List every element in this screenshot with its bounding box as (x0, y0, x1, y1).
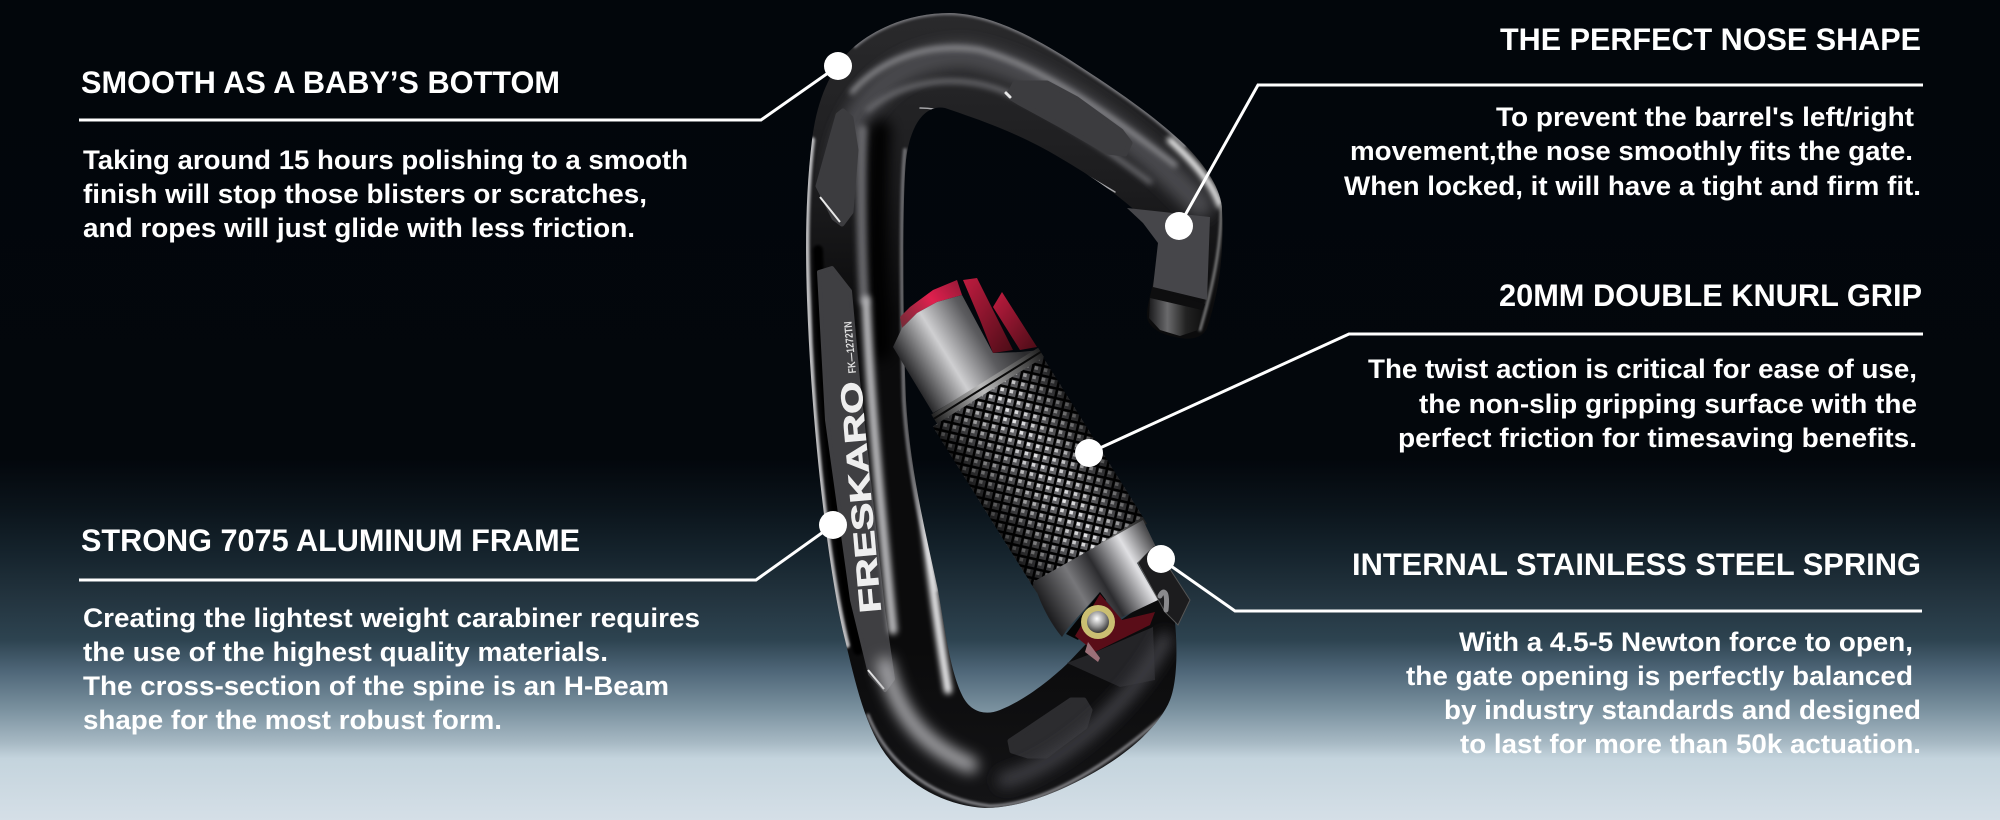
description: by industry standards and designed (1444, 695, 1921, 725)
marker dot (1147, 545, 1175, 573)
description (83, 145, 688, 243)
brand text on spine: FK—1272TN (842, 321, 859, 374)
brand text on spine (835, 321, 888, 614)
description: The cross-section of the spine is an H-Beam (83, 671, 669, 701)
leader line (1161, 559, 1922, 611)
description: With a 4.5-5 Newton force to open, (1459, 627, 1913, 657)
top collar (893, 295, 1040, 413)
description: To prevent the barrel's left/right (1496, 102, 1914, 132)
screw gate barrel (893, 278, 1190, 662)
carabiner illustration (806, 13, 1222, 808)
description: to last for more than 50k actuation. (1460, 729, 1921, 759)
description (1368, 354, 1917, 453)
leader line (79, 525, 833, 580)
description: When locked, it will have a tight and firm fit. (1344, 171, 1921, 201)
description: and ropes will just glide with less friction. (83, 213, 635, 243)
red inner blades (963, 278, 1037, 353)
marker dot (1075, 439, 1103, 467)
heading: STRONG 7075 ALUMINUM FRAME (81, 522, 580, 558)
locking pin (1081, 605, 1115, 639)
callout: smooth finish (79, 52, 852, 243)
heading: THE PERFECT NOSE SHAPE (1500, 21, 1921, 57)
description (1406, 627, 1921, 759)
heading: INTERNAL STAINLESS STEEL SPRING (1352, 546, 1921, 582)
heading: SMOOTH AS A BABY’S BOTTOM (81, 64, 560, 100)
spine highlights (866, 300, 1165, 806)
knurled grip (927, 348, 1148, 593)
bottom collar (1033, 520, 1190, 662)
marker dot (824, 52, 852, 80)
description: shape for the most robust form. (83, 705, 502, 735)
leader line (1089, 334, 1923, 453)
red rim (900, 280, 962, 328)
description: Taking around 15 hours polishing to a smooth (83, 145, 688, 175)
marker dot (1165, 212, 1193, 240)
recessed panels (818, 83, 1210, 756)
description: Creating the lightest weight carabiner requires (83, 603, 700, 633)
description: the use of the highest quality materials. (83, 637, 608, 667)
callout: aluminum frame (79, 511, 847, 735)
callout: steel spring (1147, 545, 1922, 759)
leader line (79, 66, 838, 120)
description (1344, 102, 1921, 201)
lower nose tip (1160, 592, 1167, 610)
description: the gate opening is perfectly balanced (1406, 661, 1913, 691)
description (83, 603, 700, 735)
description: perfect friction for timesaving benefits. (1398, 423, 1917, 453)
carabiner body (806, 13, 1222, 808)
callout: knurl grip (1075, 277, 1923, 467)
marker dot (819, 511, 847, 539)
callout: nose shape (1165, 21, 1923, 240)
heading: 20MM DOUBLE KNURL GRIP (1499, 277, 1922, 313)
description: the non-slip gripping surface with the (1419, 389, 1917, 419)
description: finish will stop those blisters or scratches, (83, 179, 647, 209)
leader line (1179, 85, 1923, 226)
description: The twist action is critical for ease of use, (1368, 354, 1917, 384)
brand text on spine: FRESKARO (835, 380, 888, 614)
description: movement,the nose smoothly fits the gate. (1350, 136, 1913, 166)
